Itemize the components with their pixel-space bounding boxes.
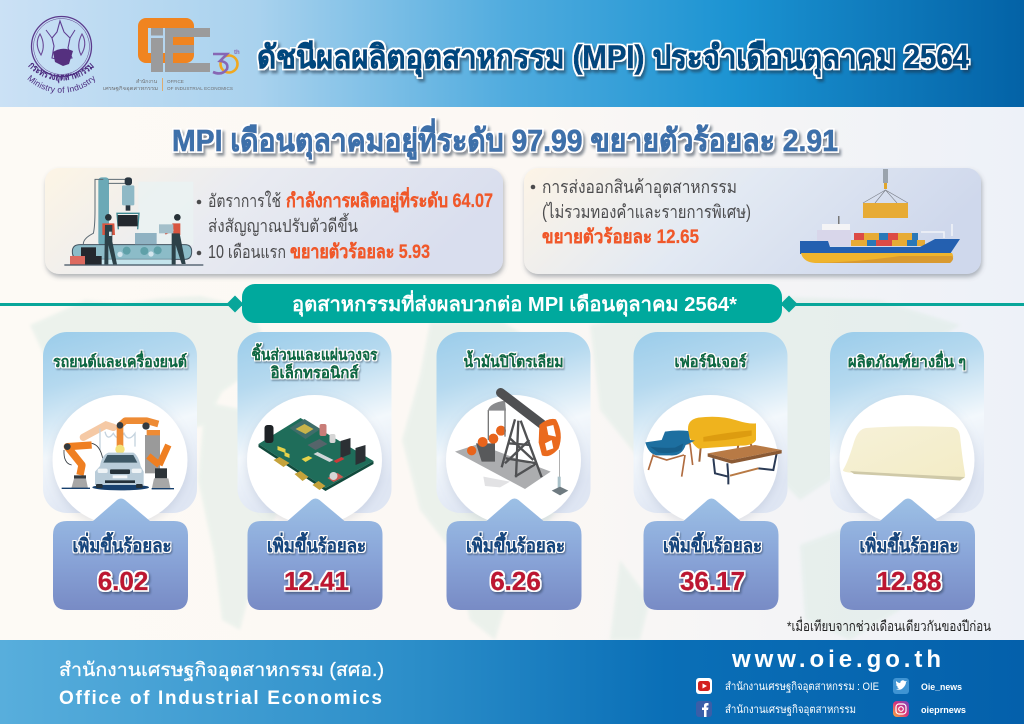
text: capacity utilisation: ขยายตัวร้อยละ 5.93 — [290, 241, 430, 263]
logo: 30th anniversary mark: th — [234, 50, 240, 56]
value box: เพิ่มขึ้นร้อยละ — [663, 532, 762, 556]
text: capacity utilisation: 10 เดือนแรก — [208, 242, 286, 262]
card: electronics — [238, 332, 392, 610]
title: ดัชนีผลผลิตอุตสาหกรรม (MPI) ประจำเดือนตุลาคม 2564 — [257, 39, 969, 78]
page background — [0, 107, 1024, 640]
card: petroleum — [436, 332, 590, 610]
icon: oil pump — [455, 393, 568, 495]
organisation name — [59, 660, 384, 709]
value box: 12.41 — [284, 566, 349, 596]
social: youtube: สำนักงานเศรษฐกิจอุตสาหกรรม : OIE — [725, 681, 879, 693]
text: exports: การส่งออกสินค้าอุตสาหกรรม — [542, 177, 737, 198]
icon: factory assembly line — [64, 177, 203, 266]
logo: Ministry of Industry seal: Ministry of Industry — [28, 75, 96, 94]
header band — [0, 0, 1024, 107]
worker left — [102, 214, 117, 264]
social: facebook — [696, 701, 856, 717]
world map backdrop — [30, 296, 960, 640]
text: capacity utilisation: ส่งสัญญาณปรับตัวดีขึ้น — [208, 213, 358, 236]
website: www.oie.go.th — [731, 646, 941, 673]
text: exports: (ไม่รวมทองคำและรายการพิเศษ) — [542, 201, 751, 222]
label: รถยนต์และเครื่องยนต์ — [53, 350, 187, 371]
card: furniture — [634, 332, 788, 610]
section ribbon: อุตสาหกรรมที่ส่งผลบวกต่อ MPI เดือนตุลาคม 2564* — [292, 289, 737, 317]
value box: 12.88 — [876, 566, 942, 596]
social: instagram — [893, 701, 966, 717]
card: rubber products — [830, 332, 984, 610]
social: instagram: oieprnews — [921, 705, 966, 716]
label: น้ำมันปิโตรเลียม — [464, 350, 564, 371]
card: electronics: อิเล็กทรอนิกส์ — [270, 362, 359, 382]
organisation name: Office of Industrial Economics — [59, 688, 382, 709]
panel: capacity utilisation — [45, 168, 503, 274]
section ribbon — [0, 284, 1024, 323]
headline: MPI เดือนตุลาคมอยู่ที่ระดับ 97.99 ขยายตัวร้อยละ 2.91 — [172, 118, 838, 160]
worker right — [159, 214, 186, 264]
icon: car and welding robots — [62, 421, 174, 490]
icon: latex pillow — [843, 426, 965, 480]
logo: Office of Industrial Economics: สำนักงาน — [136, 79, 158, 85]
logo: Ministry of Industry seal — [28, 16, 96, 94]
value box: เพิ่มขึ้นร้อยละ — [267, 532, 366, 556]
icon: circuit board — [258, 418, 374, 491]
logo: Office of Industrial Economics: OFFICE — [167, 79, 184, 84]
panel: exports — [524, 168, 981, 274]
value box — [644, 498, 778, 610]
value box: เพิ่มขึ้นร้อยละ — [466, 532, 565, 556]
footer band — [0, 640, 1024, 724]
value box — [248, 498, 382, 610]
logo: Office of Industrial Economics: เศรษฐกิจอุตสาหกรรม — [103, 85, 158, 92]
social: twitter: Oie_news — [921, 682, 962, 693]
text: capacity utilisation: กำลังการผลิตอยู่ที่ระดับ 64.07 — [286, 187, 493, 213]
value box — [840, 498, 975, 610]
value box: เพิ่มขึ้นร้อยละ — [72, 532, 172, 556]
value box — [446, 498, 582, 610]
text: exports — [531, 177, 751, 248]
logo: Office of Industrial Economics: OF INDUSTRIAL ECONOMICS — [167, 86, 233, 91]
label: ผลิตภัณฑ์ยางอื่น ๆ — [848, 350, 966, 371]
social: twitter — [893, 678, 962, 694]
value box: 36.17 — [680, 566, 745, 596]
organisation name: สำนักงานเศรษฐกิจอุตสาหกรรม (สศอ.) — [59, 660, 384, 682]
logo: Office of Industrial Economics — [103, 18, 240, 92]
social: youtube — [696, 678, 879, 694]
label: ชิ้นส่วนและแผ่นวงจร — [252, 343, 378, 364]
value box: เพิ่มขึ้นร้อยละ — [860, 532, 958, 556]
text: capacity utilisation — [197, 187, 493, 263]
card: automotive — [43, 332, 197, 610]
value box: 6.02 — [98, 566, 148, 596]
text: capacity utilisation: อัตราการใช้ — [208, 190, 281, 211]
text: exports: ขยายตัวร้อยละ 12.65 — [542, 226, 699, 248]
label: เฟอร์นิเจอร์ — [674, 353, 747, 371]
icon: sofa, armchair and table — [645, 417, 782, 484]
logo: Ministry of Industry seal: กระทรวงอุตสาหกรรม — [28, 62, 94, 84]
value box: 6.26 — [490, 566, 541, 596]
social: facebook: สำนักงานเศรษฐกิจอุตสาหกรรม — [725, 704, 856, 716]
icon: container ship — [800, 169, 960, 263]
value box — [53, 498, 188, 610]
